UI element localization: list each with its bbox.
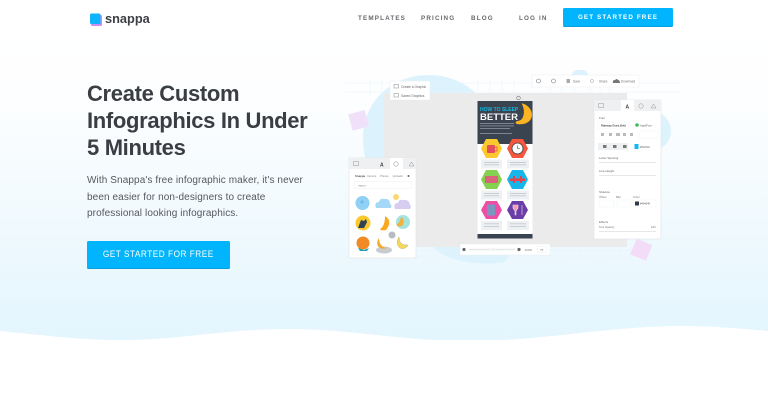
decorative sticky note: left [348, 110, 369, 131]
headline: Infographics In Under [87, 108, 307, 133]
right panel: text properties: Color [633, 195, 640, 199]
logo wordmark: snappa [105, 11, 150, 26]
description text: professional looking infographics. [87, 208, 238, 219]
left panel: stickers [349, 158, 416, 258]
description text: With Snappa's free infographic maker, it's never [87, 175, 303, 186]
bottom zoom bar: 100% [524, 248, 533, 252]
description text [87, 175, 303, 219]
card: create graphic menu: Saved Graphics [401, 94, 425, 98]
nav button: get started free: GET STARTED FREE [578, 14, 658, 21]
headline [87, 81, 308, 160]
left panel: stickers: moon [358, 184, 366, 188]
headline: Create Custom [87, 81, 239, 106]
canvas area [384, 93, 627, 247]
right panel: text properties: Text Opacity [599, 225, 615, 229]
left panel: stickers: Snappa [355, 174, 366, 178]
decorative sticky note: right [630, 239, 652, 261]
left panel: stickers: Photos [380, 174, 389, 178]
card: create graphic menu: Create a Graphic [401, 85, 426, 89]
nav: pricing: PRICING [421, 15, 455, 22]
left panel: stickers: Uploads [392, 174, 403, 178]
bottom zoom bar: 75 [540, 248, 544, 252]
right panel: text properties: Line Height [599, 169, 614, 173]
nav: blog: BLOG [471, 15, 494, 22]
right panel: text properties: Shadow [599, 190, 611, 194]
logo icon [90, 14, 102, 26]
right panel: text properties: Font [599, 116, 605, 120]
right panel: text properties: Raleway Extra Bold [601, 124, 626, 128]
description text: been easier for non-designers to create [87, 192, 265, 202]
right panel: text properties: Offset [599, 195, 607, 199]
logo [90, 11, 150, 26]
nav: log in: LOG IN [519, 15, 548, 22]
top toolbar [532, 75, 639, 87]
right panel: text properties [594, 100, 661, 239]
nav button: get started free [563, 8, 673, 27]
bottom zoom bar [460, 244, 550, 255]
right panel: text properties: Blur [616, 195, 621, 199]
top toolbar: Share [599, 79, 608, 83]
left panel: stickers: A [380, 162, 384, 168]
right panel: text properties: AppliFont [640, 124, 652, 128]
card: create graphic menu [390, 81, 430, 100]
right panel: text properties: 100 [651, 225, 656, 229]
right panel: text properties: #09c5ef [640, 145, 650, 149]
right panel: text properties: Effects [599, 220, 609, 224]
headline: 5 Minutes [87, 135, 186, 160]
right panel: text properties: Letter Spacing [599, 156, 619, 160]
CTA button: GET STARTED FOR FREE [103, 249, 214, 259]
right panel: text properties: A [626, 104, 630, 110]
CTA button [87, 241, 230, 269]
background blobs [363, 69, 671, 263]
left panel: stickers: Vectors [367, 174, 377, 178]
top toolbar: Download [621, 79, 635, 83]
infographic poster: HOW TO SLEEP [480, 107, 519, 113]
illustration: editor mockup [345, 70, 680, 264]
right panel: text properties: #404040 [640, 202, 651, 206]
nav: templates: TEMPLATES [358, 15, 406, 22]
top toolbar: Save [573, 79, 580, 83]
infographic poster [478, 96, 532, 238]
infographic poster: BETTER [480, 112, 518, 123]
